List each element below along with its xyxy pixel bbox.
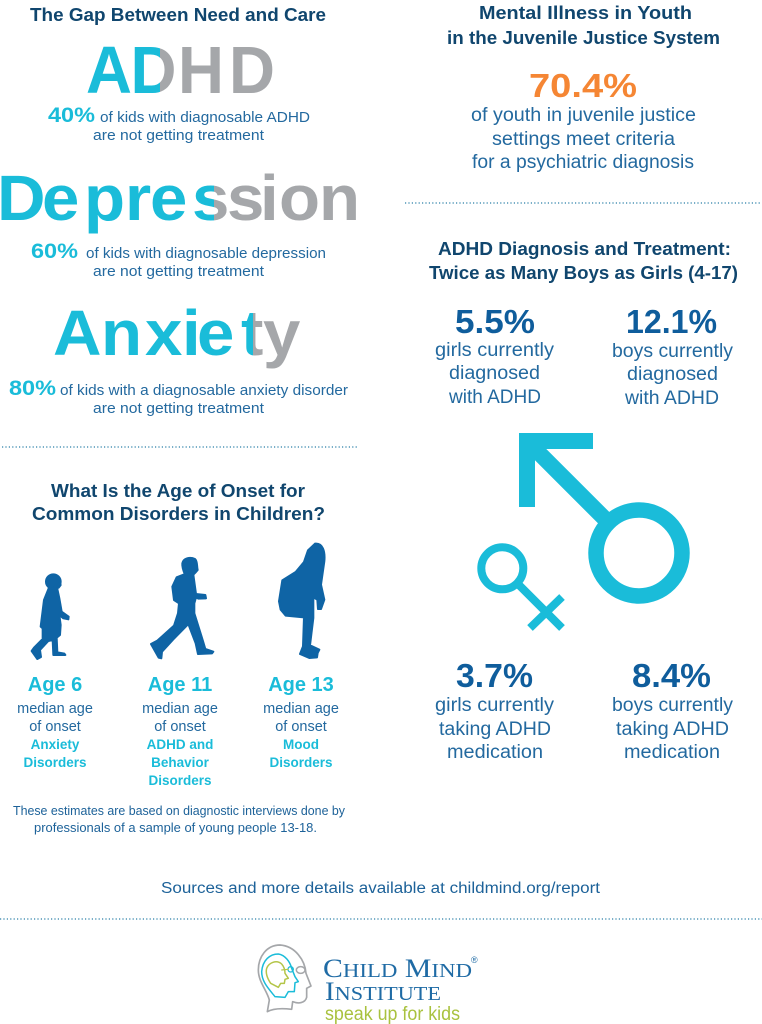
stat: boys on medication: medication: [624, 742, 720, 763]
stat: anxiety untreated: of kids with a diagnosable anxiety disorder: [60, 382, 348, 399]
stat: 70.4%: 70.4%: [529, 67, 637, 104]
column: age 6: Disorders: [23, 755, 87, 770]
column: age 13: [263, 674, 339, 770]
heading: age of onset: What Is the Age of Onset for: [51, 480, 305, 501]
stat: depression untreated: [31, 240, 326, 280]
heading: mental illness in youth: [447, 2, 720, 48]
footnote: estimates: [13, 804, 346, 835]
panel: age of onset: [13, 480, 346, 835]
column: age 6: [17, 674, 93, 770]
wordmark: Institute: INSTITUTE: [325, 977, 441, 1006]
icon: nested head outlines: [258, 945, 311, 1012]
footnote: estimates: These estimates are based on diagnostic interviews done by: [13, 804, 346, 818]
stat: depression untreated: of kids with diagnosable depression: [86, 245, 326, 262]
column: age 13: median age: [263, 701, 339, 717]
stat: anxiety untreated: 80%: [9, 377, 56, 400]
stat: girls diagnosed: diagnosed: [449, 363, 540, 384]
sources line: Sources and more details available at childmind.org/report: [161, 880, 601, 897]
column: age 13: of onset: [275, 719, 327, 735]
wordmark: Child Mind: CHILD MIND: [323, 954, 472, 983]
panel: the gap between need and care: [0, 4, 360, 417]
icon: male symbol: [526, 440, 682, 596]
heading: age of onset: [32, 480, 325, 524]
stat: depression untreated: 60%: [31, 240, 78, 263]
stat: boys on medication: taking ADHD: [616, 719, 729, 740]
big word: Anxiety: Anxiety: [53, 297, 301, 369]
icon: female symbol: [481, 547, 562, 628]
registered mark: ®: [471, 955, 478, 965]
stat: girls diagnosed: girls currently: [435, 340, 555, 361]
column: age 13: Mood: [283, 737, 319, 752]
stat: girls diagnosed: with ADHD: [448, 387, 541, 408]
panel: juvenile justice: [447, 2, 720, 173]
icon: boy with backpack silhouette: [151, 558, 213, 658]
stat: boys diagnosed: with ADHD: [624, 388, 719, 409]
heading: mental illness in youth: in the Juvenile Justice System: [447, 27, 720, 48]
big word: Depression: Depression: [0, 162, 360, 234]
column: age 11: median age: [142, 701, 218, 717]
stat: girls on medication: taking ADHD: [439, 719, 551, 740]
column: age 13: Disorders: [269, 755, 333, 770]
stat: ADHD untreated: [48, 104, 310, 144]
column: age 11: ADHD and: [147, 737, 213, 752]
stat: girls on medication: girls currently: [435, 695, 555, 716]
stat: boys on medication: boys currently: [612, 695, 733, 716]
column: age 6: median age: [17, 701, 93, 717]
stat: boys diagnosed: diagnosed: [627, 364, 718, 385]
stat: boys on medication: 8.4%: [632, 657, 711, 694]
column: age 11: Disorders: [148, 773, 212, 788]
stat: ADHD untreated: 40%: [48, 104, 95, 127]
big word: ADHD: ADHD: [86, 33, 275, 107]
heading: mental illness in youth: Mental Illness in Youth: [479, 2, 692, 23]
stat: girls on medication: [435, 657, 555, 763]
logo: Child Mind Institute: [258, 945, 478, 1024]
icon: small child silhouette: [32, 574, 69, 659]
text: youth meeting criteria: [471, 105, 696, 173]
stat: anxiety untreated: are not getting treatment: [93, 400, 265, 417]
column: age 11: Behavior: [151, 755, 210, 770]
text: youth meeting criteria: for a psychiatric diagnosis: [472, 152, 694, 173]
stat: boys diagnosed: [612, 303, 733, 409]
heading: age of onset: Common Disorders in Children?: [32, 503, 325, 524]
stat: depression untreated: are not getting treatment: [93, 263, 265, 280]
column: age 6: of onset: [29, 719, 81, 735]
heading: gap between need and care: The Gap Between Need and Care: [30, 4, 326, 25]
heading: ADHD diagnosis: [429, 238, 738, 283]
stat: girls on medication: medication: [447, 742, 543, 763]
footnote: estimates: professionals of a sample of young people 13-18.: [34, 821, 317, 835]
stat: anxiety untreated: [9, 377, 348, 417]
text: youth meeting criteria: settings meet criteria: [492, 129, 675, 150]
icon: girl with backpack silhouette: [279, 544, 325, 658]
column: age 11: Age 11: [148, 674, 212, 696]
column: age 6: Anxiety: [31, 737, 80, 752]
stat: boys diagnosed: boys currently: [612, 341, 733, 362]
column: age 11: of onset: [154, 719, 206, 735]
stat: girls on medication: 3.7%: [456, 657, 533, 694]
stat: boys diagnosed: 12.1%: [626, 303, 717, 340]
heading: ADHD diagnosis: ADHD Diagnosis and Treatment:: [438, 238, 731, 259]
stat: ADHD untreated: of kids with diagnosable ADHD: [100, 109, 310, 126]
column: age 11: [142, 674, 218, 788]
heading: ADHD diagnosis: Twice as Many Boys as Girls (4-17): [429, 262, 738, 283]
stat: girls diagnosed: [435, 303, 555, 408]
column: age 6: Age 6: [28, 674, 82, 696]
stat: ADHD untreated: are not getting treatment: [93, 127, 265, 144]
column: age 13: Age 13: [268, 674, 334, 696]
stat: boys on medication: [612, 657, 733, 763]
text: youth meeting criteria: of youth in juvenile justice: [471, 105, 696, 126]
stat: girls diagnosed: 5.5%: [455, 303, 535, 340]
panel: ADHD diagnosis and treatment: [429, 238, 738, 763]
